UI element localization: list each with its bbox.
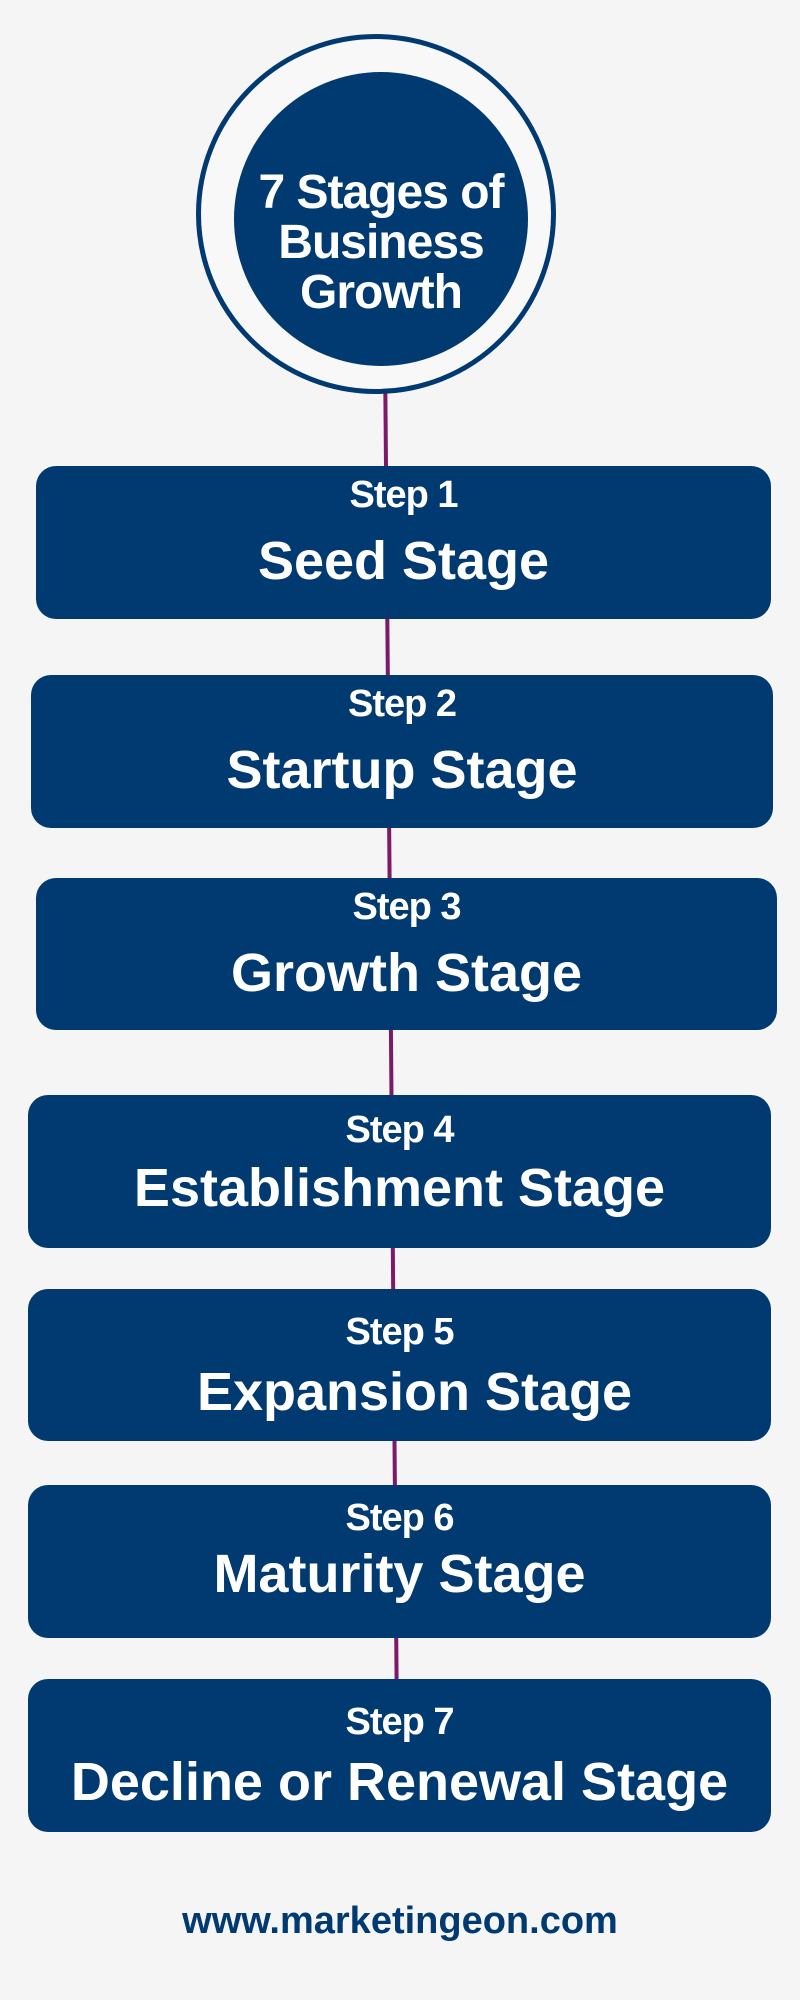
step 6 box: Maturity Stage bbox=[213, 1544, 586, 1604]
step 5 box bbox=[28, 1289, 771, 1441]
step 1 box bbox=[36, 466, 771, 619]
step 4 box: Establishment Stage bbox=[134, 1158, 665, 1218]
step 3 box: Step 3 bbox=[352, 886, 461, 928]
step 7 box bbox=[28, 1679, 771, 1832]
step 2 box bbox=[31, 675, 773, 828]
title: 7 Stages of bbox=[258, 166, 504, 219]
step 6 box bbox=[28, 1485, 771, 1638]
step 4 box bbox=[28, 1095, 771, 1248]
step 5 box: Expansion Stage bbox=[197, 1362, 632, 1422]
step 4 box: Step 4 bbox=[345, 1109, 454, 1151]
step 3 box bbox=[36, 878, 777, 1030]
step 1 box: Step 1 bbox=[349, 474, 458, 516]
title circle bbox=[196, 34, 556, 394]
title: Business bbox=[278, 216, 484, 269]
step 3 box: Growth Stage bbox=[231, 943, 582, 1003]
step 6 box: Step 6 bbox=[345, 1497, 454, 1539]
title: Growth bbox=[300, 266, 462, 319]
step 1 box: Seed Stage bbox=[258, 531, 549, 591]
title bbox=[234, 72, 528, 366]
step 5 box: Step 5 bbox=[345, 1311, 454, 1353]
footer url: www.marketingeon.com bbox=[182, 1900, 618, 1942]
step 7 box: Step 7 bbox=[345, 1701, 454, 1743]
step 2 box: Step 2 bbox=[348, 683, 456, 725]
step 7 box: Decline or Renewal Stage bbox=[71, 1752, 728, 1812]
step 2 box: Startup Stage bbox=[226, 740, 578, 800]
